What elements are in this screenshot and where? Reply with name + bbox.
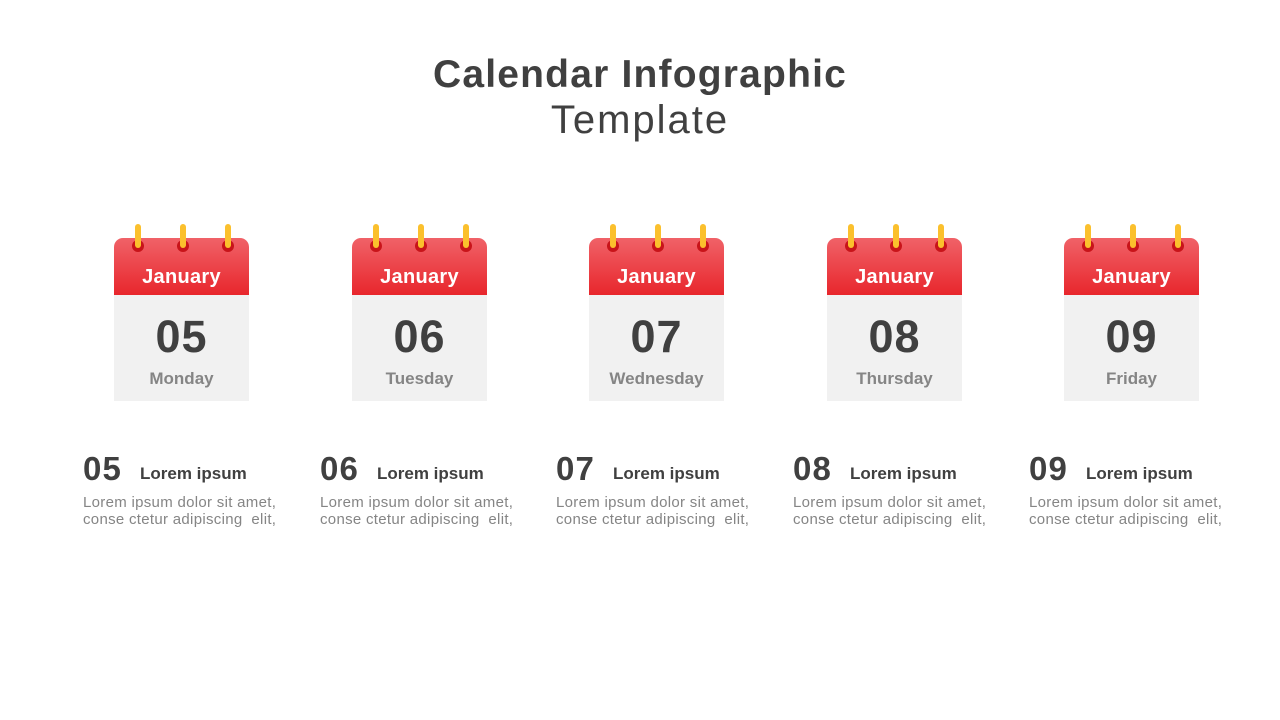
text: Lorem ipsum	[1086, 464, 1193, 483]
calendar: 07	[589, 224, 724, 401]
calendar: 08: Thursday	[856, 369, 933, 388]
calendar: 07: Wednesday	[609, 369, 704, 388]
text: Lorem ipsum dolor sit amet,	[1029, 494, 1222, 511]
calendar: 09: 09	[1105, 311, 1158, 362]
title	[433, 53, 847, 142]
text: Lorem ipsum	[377, 464, 484, 483]
calendar: 09: Friday	[1106, 369, 1157, 388]
text: conse ctetur adipiscing elit,	[1029, 511, 1222, 528]
text: 08	[793, 450, 832, 487]
calendar: 07: 07	[630, 311, 683, 362]
text: Lorem ipsum dolor sit amet,	[556, 494, 749, 511]
text: 05	[83, 450, 122, 487]
text: Lorem ipsum	[140, 464, 247, 483]
calendar: 09: January	[1092, 266, 1171, 288]
calendar: 06: January	[380, 266, 459, 288]
calendar: 06	[352, 224, 487, 401]
calendar: 08	[827, 224, 962, 401]
text: conse ctetur adipiscing elit,	[83, 511, 276, 528]
text block: 06	[320, 450, 513, 528]
title: Calendar Infographic	[433, 53, 847, 96]
text: conse ctetur adipiscing elit,	[793, 511, 986, 528]
text block: 07	[556, 450, 749, 528]
text: 06	[320, 450, 359, 487]
calendar: 05	[114, 224, 249, 401]
calendar: 07: January	[617, 266, 696, 288]
calendar: 06: 06	[393, 311, 446, 362]
text block: 08	[793, 450, 986, 528]
text block: 09	[1029, 450, 1222, 528]
text: conse ctetur adipiscing elit,	[556, 511, 749, 528]
text: conse ctetur adipiscing elit,	[320, 511, 513, 528]
calendar: 05: Monday	[149, 369, 214, 388]
calendar: 08: 08	[868, 311, 921, 362]
text: Lorem ipsum	[850, 464, 957, 483]
calendar: 08: January	[855, 266, 934, 288]
text block: 05	[83, 450, 276, 528]
calendar: 05: January	[142, 266, 221, 288]
text: Lorem ipsum dolor sit amet,	[320, 494, 513, 511]
text: 09	[1029, 450, 1068, 487]
text: Lorem ipsum dolor sit amet,	[83, 494, 276, 511]
calendar: 05: 05	[155, 311, 208, 362]
calendar: 09	[1064, 224, 1199, 401]
text: 07	[556, 450, 595, 487]
calendar: 06: Tuesday	[386, 369, 453, 388]
title: Template	[551, 98, 729, 142]
text: Lorem ipsum dolor sit amet,	[793, 494, 986, 511]
text: Lorem ipsum	[613, 464, 720, 483]
